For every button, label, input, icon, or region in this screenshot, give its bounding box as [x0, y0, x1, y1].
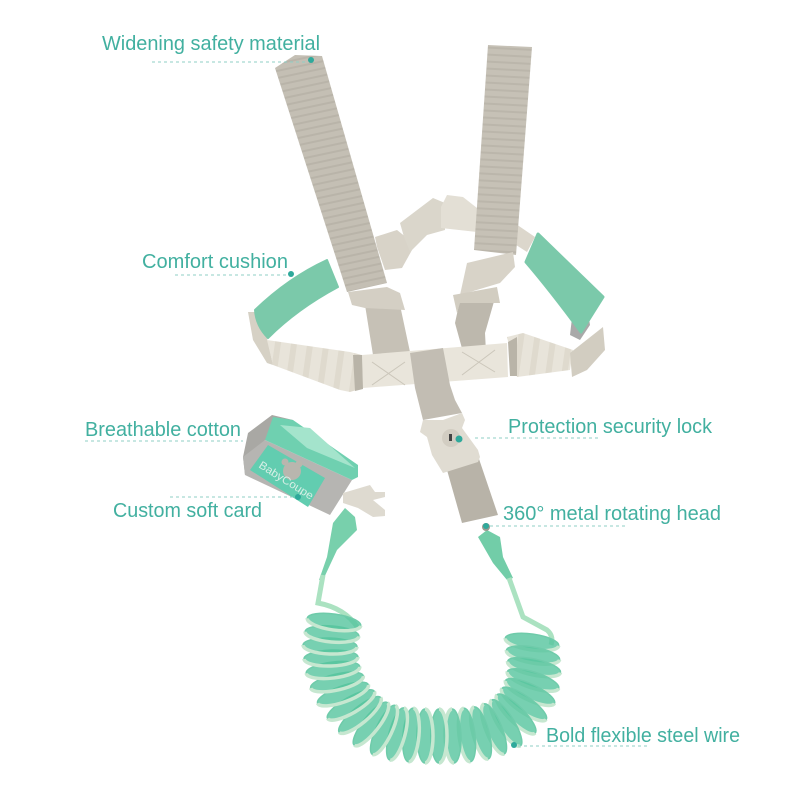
callout: 360 degree metal rotating head: 360° metal rotating head: [503, 503, 721, 525]
callout: protection security lock: Protection security lock: [508, 416, 713, 438]
panel: right long strap: [453, 45, 532, 313]
back strap and buckle: [375, 195, 535, 270]
callout: custom soft card: [113, 494, 301, 522]
callout: bold flexible steel wire: Bold flexible steel wire: [546, 725, 740, 747]
callout: custom soft card: Custom soft card: [113, 500, 262, 522]
icon: wrist strap with custom soft card: [243, 415, 385, 517]
callout: widening safety material: Widening safety material: [102, 33, 320, 55]
bold flexible steel wire coil: [303, 610, 562, 763]
callout: protection security lock: [456, 416, 713, 442]
shoulder strap lower pieces: [365, 298, 495, 355]
callout: comfort cushion: Comfort cushion: [142, 251, 288, 273]
icon: wrist strap with custom soft card: BabyCoupe: [256, 459, 315, 502]
panel: left long strap: [275, 55, 405, 310]
icon: right comfort cushion: [526, 234, 603, 332]
waist belt: [248, 306, 605, 392]
coil cord tubes and connectors: [318, 508, 552, 645]
icon: left comfort cushion: [255, 260, 338, 338]
centre strap and security lock: [410, 348, 498, 523]
callout: breathable cotton: Breathable cotton: [85, 419, 241, 441]
